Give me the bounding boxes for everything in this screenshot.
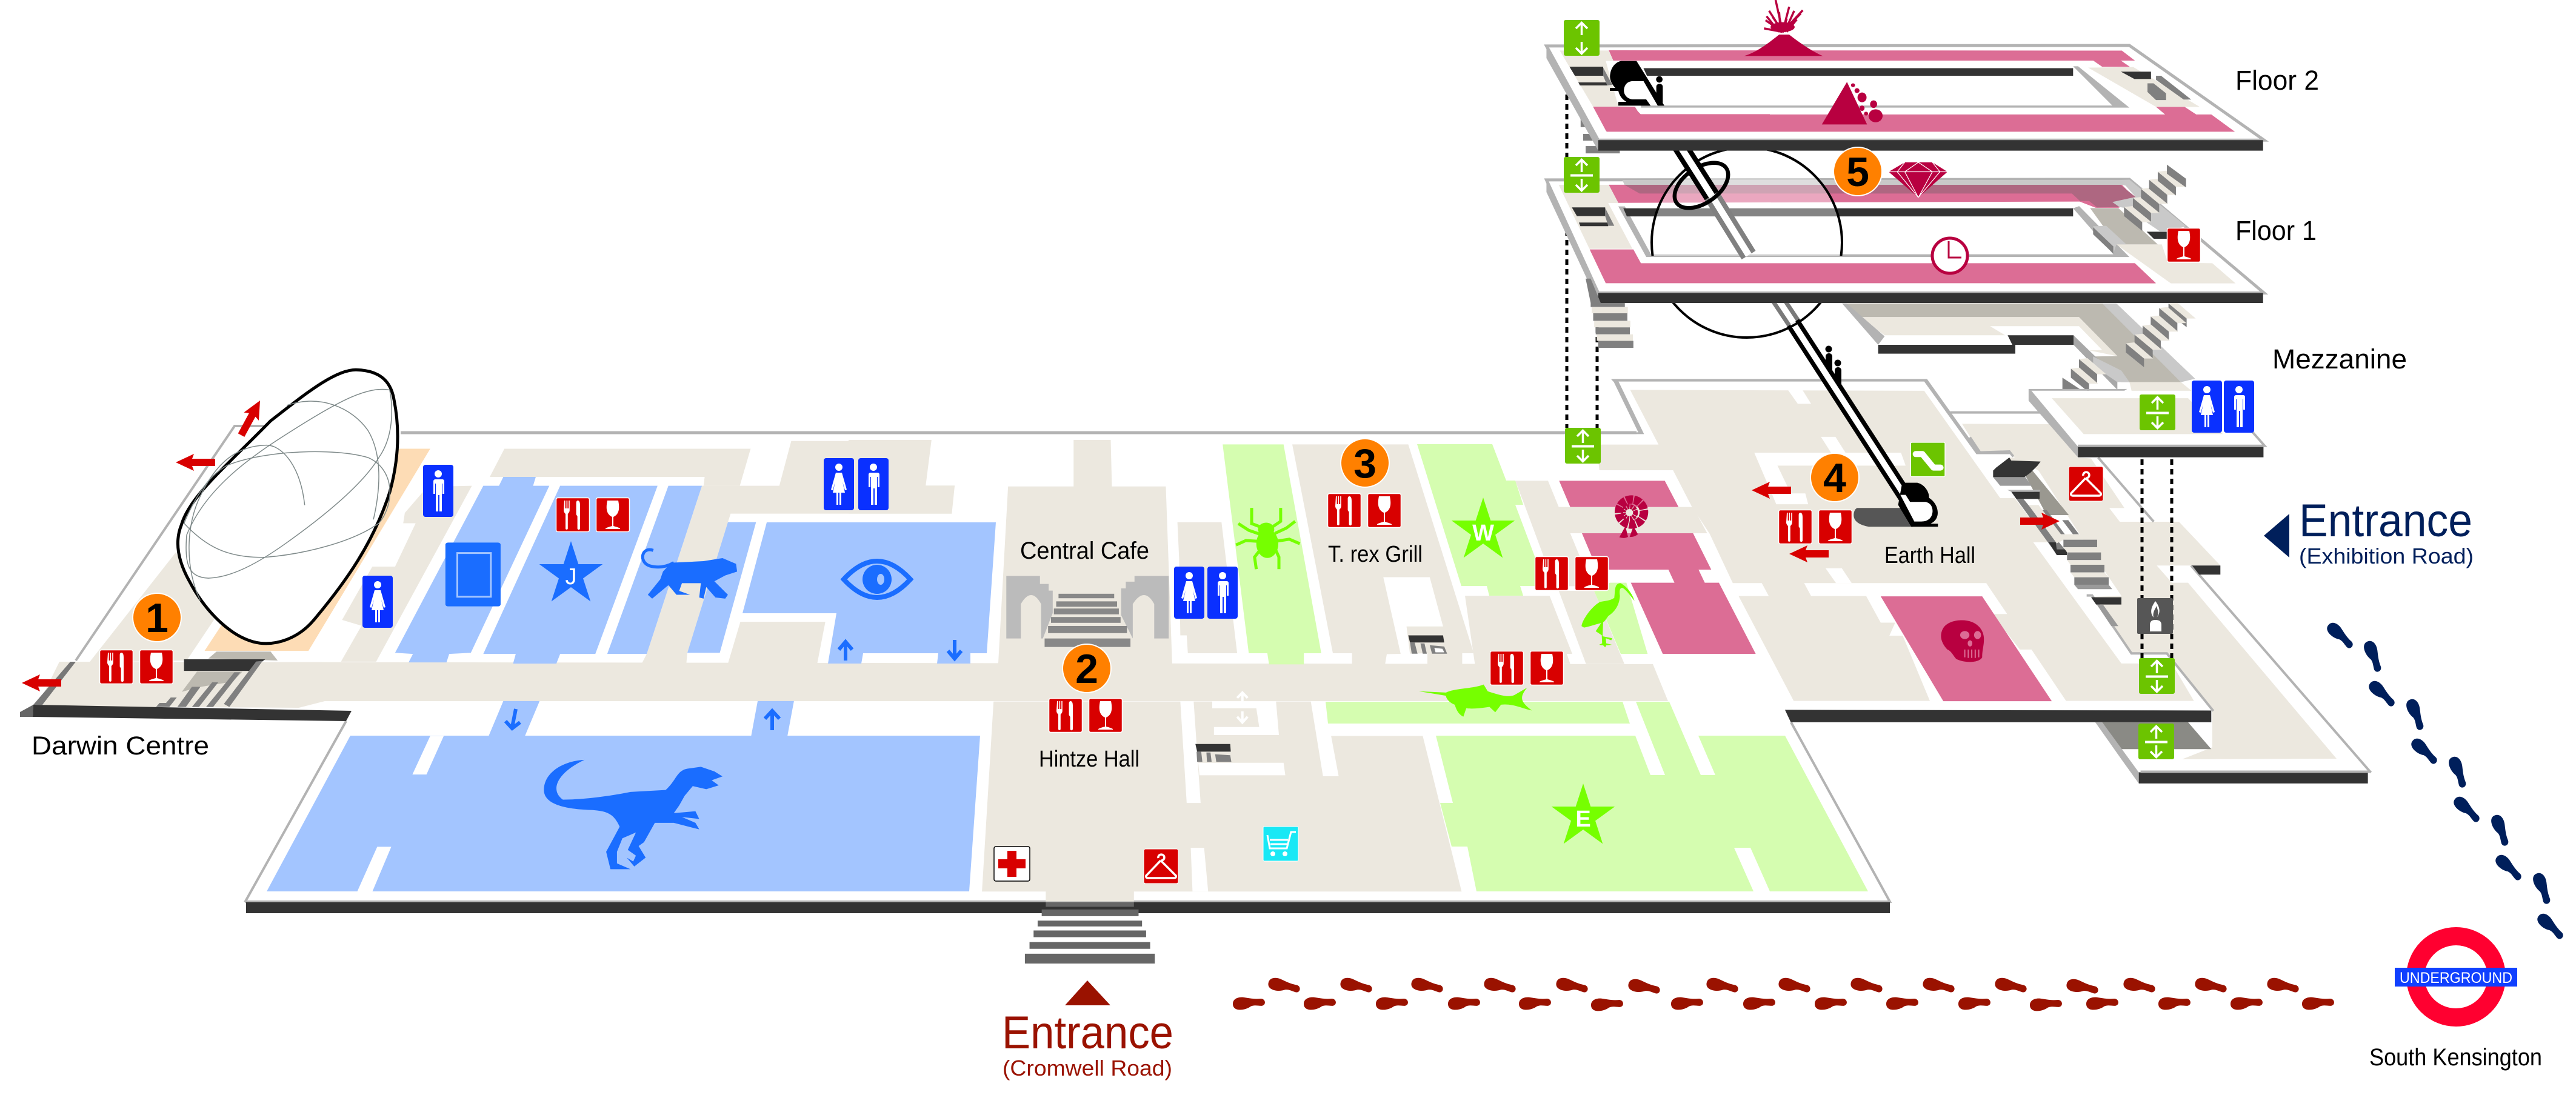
stair flights to the mezzanine [1993, 458, 2220, 626]
icon: cloakroom hanger [1144, 849, 1178, 884]
green zone rooms [1326, 444, 1868, 891]
label: South Kensington: South Kensington [2369, 1044, 2542, 1071]
numbered marker 4: 4 [1823, 455, 1846, 501]
icon: jaguar [642, 550, 737, 599]
icon: cloakroom hanger [2069, 467, 2103, 501]
icon: rock slide [1822, 82, 1883, 124]
callout: Cromwell Road entrance: Entrance [1002, 1007, 1173, 1059]
numbered marker 3 [1341, 439, 1389, 487]
icon: Earth Hall escalator hood [1898, 483, 1938, 527]
floor 1 slab [1546, 179, 2264, 303]
icon: Darwin Centre cocoon [178, 370, 398, 644]
icon: people on the escalator [1826, 345, 1841, 398]
escalator tube below floor 1 [1774, 293, 1914, 510]
label: T. rex Grill: T. rex Grill [1328, 542, 1423, 567]
Hintze Hall and central rooms [849, 440, 1474, 902]
floor 1 left rooms and stairs [1559, 185, 1632, 249]
blue rooms [267, 522, 996, 891]
Darwin Centre stairs [156, 661, 262, 707]
label: Earth Hall: Earth Hall [1884, 543, 1975, 568]
icon: W star [1452, 498, 1515, 557]
icon: Jerwood star [539, 541, 602, 601]
panel: Central Cafe staircase [1006, 576, 1169, 647]
icon: E star [1552, 784, 1615, 844]
panel: east wing and stairs [1962, 424, 2371, 784]
icon: diamond [1889, 162, 1947, 198]
label: Central Cafe: Central Cafe [1020, 538, 1149, 564]
callout: Cromwell Road entrance [1002, 980, 1173, 1080]
globe lightened area over floor 1 [1650, 150, 1843, 256]
floor 1 left under-stairs [1586, 279, 1601, 303]
icon: candle / prayer room [2137, 598, 2173, 634]
Darwin Centre wing rooms [89, 448, 430, 671]
outer walls of the ground floor [76, 426, 1890, 902]
lower stair well and wing wall [2095, 722, 2369, 784]
icon: small stairs [1195, 744, 1232, 762]
icon: grey arcades [1006, 576, 1169, 639]
callout: Cromwell Road entrance: (Cromwell Road) [1003, 1056, 1172, 1080]
icon: E star: E [1575, 807, 1591, 832]
Earth Hall escalator base [1854, 508, 1913, 527]
wall bands of the ground floor [20, 662, 1890, 913]
icon: picture frame [445, 542, 501, 607]
mezzanine stairs [2063, 302, 2196, 393]
label: Hintze Hall: Hintze Hall [1039, 747, 1140, 772]
icon: Cromwell Road entrance steps [1025, 902, 1155, 964]
icon: ammonite [1619, 499, 1644, 538]
lift icons [1564, 20, 2175, 759]
icon: faded lift arrows [1237, 693, 1247, 722]
icon: eye [844, 561, 910, 597]
icon: tilted ring around escalator [1666, 154, 1737, 217]
label: Floor 1: Floor 1 [2235, 215, 2317, 246]
main corridor [38, 662, 1668, 708]
icon: central steps [1044, 594, 1130, 647]
blue footprints to the Exhibition Road entrance [2324, 620, 2567, 942]
escalator tube upper section between floors [1679, 144, 1712, 196]
label: Mezzanine: Mezzanine [2272, 344, 2407, 374]
panel: floor 1 [1546, 165, 2264, 303]
restaurant icons [99, 228, 2200, 732]
west galleries: blue zone and corridors [341, 441, 849, 736]
Earth Hall rooms [1597, 379, 2211, 722]
toilet icons [362, 381, 2254, 628]
numbered marker 5 [1834, 147, 1882, 196]
icon: escalator head and person on floor 2 [1610, 61, 1664, 105]
icon: shop trolley [1263, 827, 1298, 861]
icon: escalator sign [1910, 442, 1945, 477]
numbered marker 4 [1810, 453, 1859, 502]
red direction arrows [22, 396, 2060, 691]
icon: dinosaur [544, 760, 722, 869]
floor 2 slab [1546, 45, 2264, 153]
icon: skull [1941, 620, 1984, 662]
callout: Exhibition Road entrance [2264, 495, 2474, 568]
numbered marker 1 [133, 593, 181, 642]
callout: Exhibition Road entrance: Entrance [2299, 495, 2472, 547]
icon: small stairs [1408, 635, 1447, 654]
numbered marker 2: 2 [1075, 646, 1098, 692]
escalator tube lower section between floors [1709, 191, 1749, 255]
icon: spider [1236, 508, 1300, 569]
numbered marker 1: 1 [145, 595, 169, 641]
panel: mezzanine [1590, 302, 2264, 458]
label: Darwin Centre: Darwin Centre [32, 731, 209, 761]
Exhibition Road wing [1962, 424, 2371, 773]
mezzanine side stairs [1590, 303, 1633, 348]
globe outline behind floor 1 [1652, 147, 1842, 338]
icon: blue arrows [506, 640, 961, 730]
floor 1 atrium hole [1618, 206, 2129, 257]
red zone west rooms [1465, 481, 1756, 664]
icon: heron [1581, 583, 1635, 647]
floor 2 left rooms and stairs [1560, 50, 1770, 131]
icon: London Underground roundel: UNDERGROUND [2400, 970, 2512, 987]
icon: volcano [1744, 0, 1823, 56]
numbered marker 3: 3 [1353, 441, 1376, 487]
mezzanine balcony and ghost floor [1842, 304, 2202, 424]
icon: clock [1932, 238, 1967, 273]
dotted lift shafts [1567, 56, 2172, 658]
floor 1 right rooms and ghost overlays [1623, 165, 2235, 284]
icon: first aid [994, 847, 1030, 881]
icon: Jerwood star: J [565, 564, 577, 590]
icon: London Underground roundel [2395, 936, 2517, 1017]
callout: Exhibition Road entrance: (Exhibition Road) [2299, 544, 2474, 568]
numbered marker 5: 5 [1846, 149, 1869, 195]
numbered marker 2 [1063, 644, 1111, 693]
label: Floor 2: Floor 2 [2235, 65, 2319, 96]
mezzanine floor slab [1950, 389, 2264, 458]
panel: ground floor plan [20, 379, 2211, 913]
red footprints to the Cromwell Road entrance [1232, 977, 2335, 1012]
panel: floor 2 [1546, 45, 2264, 153]
icon: W star: W [1472, 521, 1494, 546]
icon: swordfish [1419, 685, 1532, 717]
